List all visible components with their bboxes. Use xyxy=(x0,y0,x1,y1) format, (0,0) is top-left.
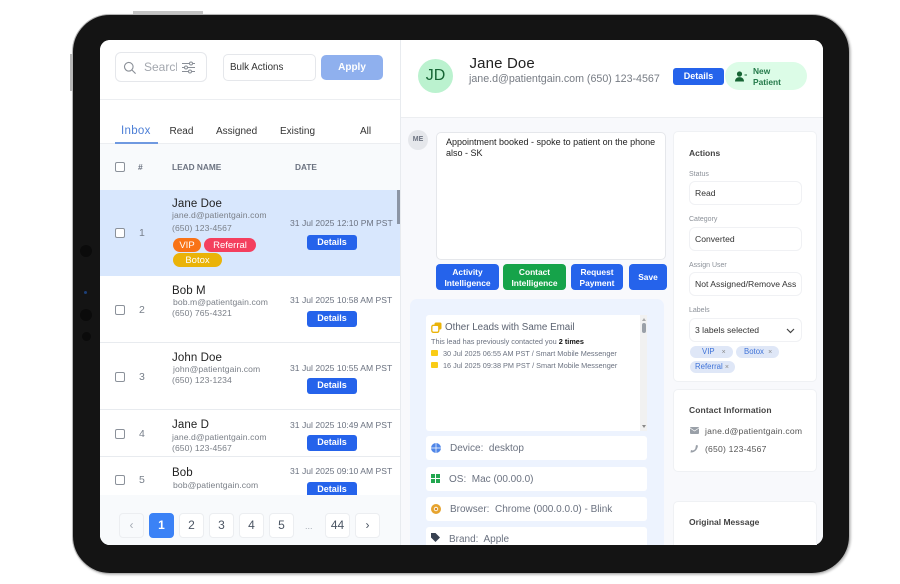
row 1: Jane Doe: (650) 123-4567 xyxy=(172,223,232,233)
row 4: Jane D: (650) 123-4567 xyxy=(172,443,232,453)
card: other leads with same email: 30 Jul 2025 06:55 AM PST / Smart Mobile Messenger xyxy=(443,349,617,358)
icon: mail xyxy=(431,362,438,368)
details button xyxy=(673,68,724,85)
row 3: John Doe: Details xyxy=(317,380,347,390)
card: original message xyxy=(673,501,817,545)
apply button xyxy=(321,55,383,80)
tabs xyxy=(100,100,400,144)
table header xyxy=(100,144,400,190)
row 4: Jane D: 4 xyxy=(139,428,145,440)
tab: existing: Existing xyxy=(280,126,315,137)
card: other leads with same email: This lead has previously contacted you 2 times xyxy=(431,337,584,346)
icon: copy xyxy=(431,322,442,333)
card: actions xyxy=(673,131,817,382)
tablet side button xyxy=(70,54,72,91)
lead contact line: jane.d@patientgain.com (650) 123-4567 xyxy=(469,73,660,85)
row 2: Bob M: Details xyxy=(317,313,347,323)
me avatar: ME xyxy=(413,136,423,143)
chip: Referral: Referral × xyxy=(695,362,729,371)
row 3: John Doe: john@patientgain.com xyxy=(173,364,260,374)
row 2: Bob M xyxy=(100,276,400,343)
active tab underline xyxy=(115,142,158,144)
button: contact intelligence: Intelligence xyxy=(511,278,558,288)
button: activity intelligence: Activity xyxy=(452,267,483,277)
panel: lead detail xyxy=(401,40,823,545)
pagination controls: 3 xyxy=(218,518,225,532)
row 3: John Doe: 31 Jul 2025 10:55 AM PST xyxy=(290,363,392,373)
row 5: Bob: Bob xyxy=(172,467,193,479)
icon: tag xyxy=(431,533,440,542)
status field: Read xyxy=(695,188,716,198)
panel: intelligence xyxy=(410,299,664,545)
row 4: Jane D: Jane D xyxy=(172,419,209,431)
icon: globe xyxy=(431,443,441,453)
labels label: Labels xyxy=(689,307,710,314)
row 3: John Doe: (650) 123-1234 xyxy=(172,375,232,385)
pagination controls: 5 xyxy=(278,518,285,532)
row 1: Jane Doe: 31 Jul 2025 12:10 PM PST xyxy=(290,218,393,228)
status field xyxy=(689,181,802,205)
icon: chrome xyxy=(431,504,441,514)
pagination controls: › xyxy=(366,518,370,532)
new patient badge: New xyxy=(753,66,770,76)
details button: Details xyxy=(684,71,713,81)
tab: read: Read xyxy=(170,126,193,137)
lead name: Jane Doe xyxy=(470,55,535,72)
button: save xyxy=(629,264,667,290)
row 1: Jane Doe: Jane Doe xyxy=(172,198,222,210)
icon: filter sliders xyxy=(182,62,195,74)
icon: windows xyxy=(431,474,440,483)
row 5: Bob: 5 xyxy=(139,474,145,486)
button: request payment xyxy=(571,264,623,290)
assign user field xyxy=(689,272,802,296)
button: contact intelligence xyxy=(503,264,566,290)
row 2: Bob M: 31 Jul 2025 10:58 AM PST xyxy=(290,295,392,305)
divider xyxy=(100,99,400,100)
pagination controls: ‹ xyxy=(130,518,134,532)
card scrollbar xyxy=(640,315,647,431)
card: contact information: (650) 123-4567 xyxy=(705,444,767,454)
icon: chevron xyxy=(786,328,794,334)
icon: phone xyxy=(690,445,698,452)
button: save: Save xyxy=(638,272,658,282)
note textarea: also - SK xyxy=(446,148,483,158)
card: original message: Original Message xyxy=(689,517,759,527)
row 1: Jane Doe: 1 xyxy=(139,227,145,239)
chip: Botox xyxy=(736,346,779,358)
tab: assigned: Assigned xyxy=(216,126,257,137)
info: brand: Brand: Apple xyxy=(449,534,509,545)
pagination controls: 4 xyxy=(248,518,255,532)
front camera dots xyxy=(80,245,92,341)
row 5: Bob xyxy=(100,457,400,495)
category field: Converted xyxy=(695,234,735,244)
header checkbox xyxy=(115,162,125,172)
row 3: John Doe: John Doe xyxy=(172,352,222,364)
avatar JD xyxy=(418,59,453,93)
pagination controls: 2 xyxy=(188,518,195,532)
row 1: Jane Doe: jane.d@patientgain.com xyxy=(172,210,267,220)
row 3: John Doe xyxy=(100,343,400,410)
note textarea: Appointment booked - spoke to patient on the phone xyxy=(446,137,655,147)
button: request payment: Payment xyxy=(580,278,614,288)
details button: Details xyxy=(317,237,347,247)
info: browser: Browser: Chrome (000.0.0.0) - Blink xyxy=(450,504,612,515)
info: OS xyxy=(426,467,647,491)
me avatar xyxy=(408,130,428,150)
details button xyxy=(307,235,357,250)
icon: user plus xyxy=(735,71,747,82)
button: contact intelligence: Contact xyxy=(519,267,550,277)
bulk actions select: Bulk Actions xyxy=(230,62,283,73)
icon: envelope xyxy=(690,427,699,434)
button: request payment: Request xyxy=(580,267,614,277)
assign user label: Assign User xyxy=(689,262,727,269)
card: other leads with same email: Other Leads with Same Email xyxy=(445,322,575,333)
tablet top button xyxy=(133,11,203,14)
row 5: Bob: bob@patientgain.com xyxy=(173,480,258,490)
row 4: Jane D: Details xyxy=(317,437,347,447)
tag: Referral: Referral xyxy=(213,240,247,251)
detail header xyxy=(401,40,823,118)
info: browser xyxy=(426,497,647,521)
avatar JD: JD xyxy=(426,67,445,84)
row 3: John Doe: 3 xyxy=(139,371,145,383)
app screen xyxy=(100,40,823,545)
labels select: 3 labels selected xyxy=(695,325,759,335)
category field xyxy=(689,227,802,251)
chip: VIP xyxy=(690,346,733,358)
chip: Referral xyxy=(690,361,735,373)
row 2: Bob M: (650) 765-4321 xyxy=(172,308,232,318)
apply button: Apply xyxy=(338,62,366,73)
pagination controls xyxy=(119,513,380,538)
new patient badge: Patient xyxy=(753,77,781,87)
panel: lead list xyxy=(100,40,401,545)
info: OS: OS: Mac (00.00.0) xyxy=(449,474,533,485)
row 1: Jane Doe xyxy=(100,190,400,276)
status label: Status xyxy=(689,171,709,178)
category label: Category xyxy=(689,216,717,223)
note textarea xyxy=(436,132,666,260)
pagination controls: 44 xyxy=(331,518,344,532)
card: other leads with same email: 16 Jul 2025 09:38 PM PST / Smart Mobile Messenger xyxy=(443,361,617,370)
row 5: Bob: Details xyxy=(317,484,347,494)
tab: inbox active: Inbox xyxy=(121,125,151,137)
icon: magnifier xyxy=(124,62,136,74)
column: date: DATE xyxy=(295,162,317,172)
actions heading: Actions xyxy=(689,148,720,158)
button: activity intelligence xyxy=(436,264,499,290)
row 4: Jane D: jane.d@patientgain.com xyxy=(172,432,267,442)
contact heading: Contact Information xyxy=(689,405,772,415)
icon: mail xyxy=(431,350,438,356)
row 2: Bob M: bob.m@patientgain.com xyxy=(173,297,268,307)
tag: VIP xyxy=(173,238,201,252)
row 2: Bob M: Bob M xyxy=(172,285,206,297)
tab: all: All xyxy=(360,126,371,137)
search box xyxy=(115,52,207,82)
pagination controls: ... xyxy=(305,521,313,531)
column: number: # xyxy=(138,162,143,172)
row 4: Jane D: 31 Jul 2025 10:49 AM PST xyxy=(290,420,392,430)
card: contact information: jane.d@patientgain.com xyxy=(705,426,802,436)
list scrollbar xyxy=(397,190,400,224)
column: lead name: LEAD NAME xyxy=(172,162,221,172)
row 5: Bob: 31 Jul 2025 09:10 AM PST xyxy=(290,466,392,476)
pagination controls: 1 xyxy=(158,518,165,532)
button: activity intelligence: Intelligence xyxy=(444,278,491,288)
chip: VIP: VIP × xyxy=(702,347,726,356)
new patient badge xyxy=(725,62,807,90)
chip: Botox: Botox × xyxy=(744,347,772,356)
info: device: Device: desktop xyxy=(450,443,524,454)
card: other leads with same email xyxy=(426,315,647,431)
row 4: Jane D xyxy=(100,410,400,457)
tag: Referral xyxy=(204,238,256,252)
pagination xyxy=(100,495,400,545)
labels select xyxy=(689,318,802,342)
tag: VIP: VIP xyxy=(179,240,195,251)
tag: Botox: Botox xyxy=(185,255,210,266)
info: brand xyxy=(426,527,647,545)
bulk actions select xyxy=(223,54,316,81)
row 2: Bob M: 2 xyxy=(139,304,145,316)
assign user field: Not Assigned/Remove Ass xyxy=(695,279,796,289)
card: contact information xyxy=(673,389,817,472)
tag: Botox xyxy=(173,253,222,267)
info: device xyxy=(426,436,647,460)
